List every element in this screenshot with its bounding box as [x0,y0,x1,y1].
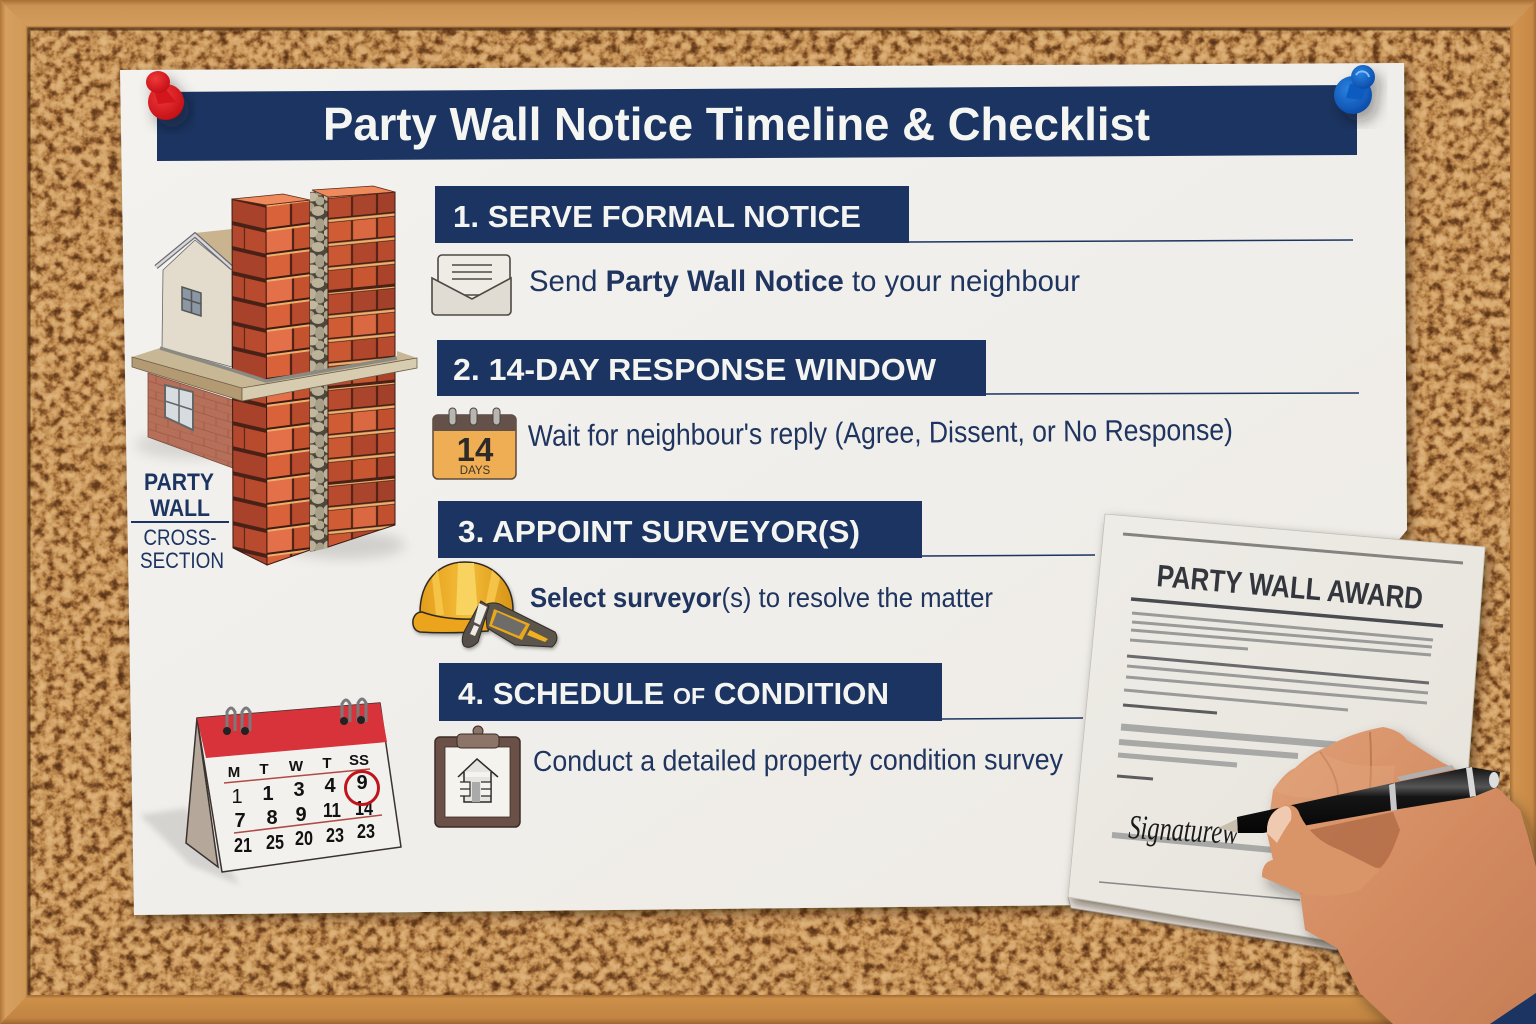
step 4 heading [439,663,1083,721]
illustration: desk calendar: T [322,755,332,772]
illustration: desk calendar: 1 [231,786,243,808]
illustration: desk calendar: SS [349,752,369,769]
step 2: response window [433,340,1359,479]
icon: 14 days calendar [433,408,516,479]
brick wall [232,186,405,565]
paper sheet [120,63,1407,915]
step 4: schedule of condition [435,663,1083,827]
icon: hard hat and tool [413,562,557,647]
wall label: SECTION [140,548,224,573]
illustration: desk calendar: 9 [295,804,307,826]
icon: clipboard with house [435,726,520,827]
document: party wall award: PARTY WALL AWARD [1155,558,1424,616]
illustration: desk calendar: W [289,758,304,775]
illustration: desk calendar: 20 [295,828,313,850]
thumbnail [1267,806,1291,843]
step 3 heading: 3. APPOINT SURVEYOR(S) [458,514,860,549]
document: party wall award [1068,514,1485,950]
step 2 heading [437,340,1359,396]
illustration: party wall cross-section [131,186,417,573]
illustration: desk calendar: 14 [355,798,374,820]
icon: red push pin [146,71,184,120]
icon: 14 days calendar: 14 [457,431,494,468]
illustration: desk calendar [140,699,401,885]
wall label: PARTY [144,469,214,496]
illustration: desk calendar: 21 [234,835,252,857]
step 2 text: Wait for neighbour's reply (Agree, Dissent, or No Response) [528,414,1233,453]
title banner: Party Wall Notice Timeline & Checklist [323,98,1150,150]
wall label: CROSS- [144,525,216,550]
step 3 heading [438,501,1095,558]
title banner [157,85,1357,161]
sleeve [1490,993,1536,1024]
illustration: desk calendar: 11 [323,800,341,822]
illustration: desk calendar: 1 [262,783,274,805]
concrete slab [132,348,417,401]
wall label: WALL [150,495,210,522]
illustration: desk calendar: 9 [356,772,368,794]
step 1 text: Send Party Wall Notice to your neighbour [529,265,1080,298]
illustration: desk calendar: 23 [326,825,344,847]
illustration: desk calendar: 3 [293,779,305,801]
house lower storey [135,373,245,468]
step 1: serve formal notice [432,186,1353,315]
wall label [131,469,229,573]
icon: blue push pin [1334,65,1375,114]
illustration: desk calendar: 25 [266,832,284,854]
illustration: desk calendar: 7 [234,810,246,832]
icon: 14 days calendar: DAYS [460,465,491,477]
step 1 heading: 1. SERVE FORMAL NOTICE [453,199,861,234]
illustration: desk calendar: 8 [266,807,278,829]
step 4 heading: 4. SCHEDULE OF CONDITION [458,676,889,711]
illustration: desk calendar: 4 [324,775,336,797]
house upper storey [156,229,232,367]
illustration: desk calendar: 23 [357,821,375,843]
illustration: desk calendar: M [228,764,240,781]
step 4 text: Conduct a detailed property condition survey [533,744,1063,778]
illustration: hand holding pen [1218,727,1536,1024]
step 3: appoint surveyors [413,501,1095,647]
illustration: desk calendar: T [259,761,269,778]
step 3 text: Select surveyor(s) to resolve the matter [530,582,993,613]
step 2 heading: 2. 14-DAY RESPONSE WINDOW [453,352,937,387]
thumb [1262,805,1380,896]
document: party wall award: Signaturew [1128,809,1240,852]
step 1 heading [435,186,1353,243]
pen [1218,765,1500,833]
icon: envelope [432,255,511,315]
hand [1262,727,1536,1024]
